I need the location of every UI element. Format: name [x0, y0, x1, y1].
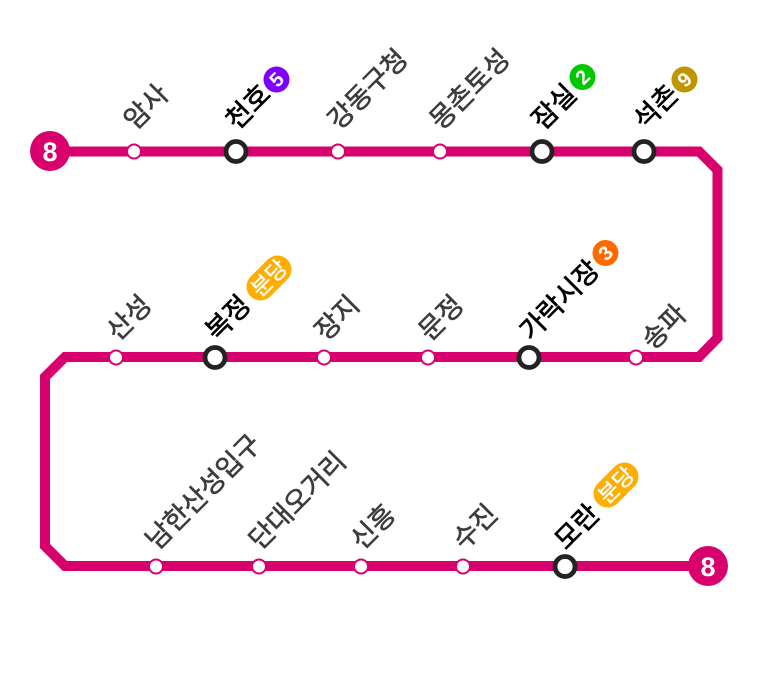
label: 송파: 송파 [636, 299, 692, 355]
label: 천호: 천호 [220, 79, 276, 135]
label: 산성: 산성 [101, 290, 157, 346]
terminal: end 8 [688, 546, 728, 586]
label: 강동구청: 강동구청 [322, 44, 414, 135]
transfer stations row 1 [226, 142, 654, 162]
label: 몽촌토성: 몽촌토성 [424, 44, 516, 135]
label: 수진: 수진 [447, 499, 503, 555]
label: 단대오거리: 단대오거리 [243, 446, 352, 555]
stations row 3 [149, 560, 470, 574]
label: 장지: 장지 [309, 290, 365, 346]
badge: line 9: 9 [673, 68, 697, 92]
label: 모란: 모란 [549, 499, 605, 555]
label: 가락시장: 가락시장 [514, 255, 606, 346]
badge: line 5: 5 [265, 68, 289, 92]
badge: line 3: 3 [594, 242, 618, 265]
label: 암사: 암사 [118, 79, 174, 135]
label: 잠실: 잠실 [526, 79, 582, 135]
subway line 8 route [45, 152, 718, 566]
terminal: end 8: 8 [700, 552, 716, 582]
badge: Bundang at Bokjeong [241, 250, 297, 306]
label: 남한산성입구: 남한산성입구 [140, 429, 267, 555]
terminal: start 8 [30, 131, 70, 171]
transfer station: Moran [555, 556, 575, 576]
terminal: start 8: 8 [42, 137, 58, 167]
badge: Bundang at Bokjeong: 분당 [246, 255, 293, 302]
transfer stations row 2 [205, 348, 539, 368]
stations row 2 [109, 350, 643, 364]
label: 신흥: 신흥 [345, 499, 401, 555]
label: 복정: 복정 [200, 290, 256, 346]
stations row 1 [127, 144, 447, 158]
badge: Bundang at Moran: 분당 [593, 462, 640, 509]
badge: line 2: 2 [571, 66, 595, 89]
label: 문정: 문정 [413, 290, 469, 346]
label: 석촌: 석촌 [628, 79, 684, 135]
badge: Bundang at Moran [588, 457, 644, 513]
